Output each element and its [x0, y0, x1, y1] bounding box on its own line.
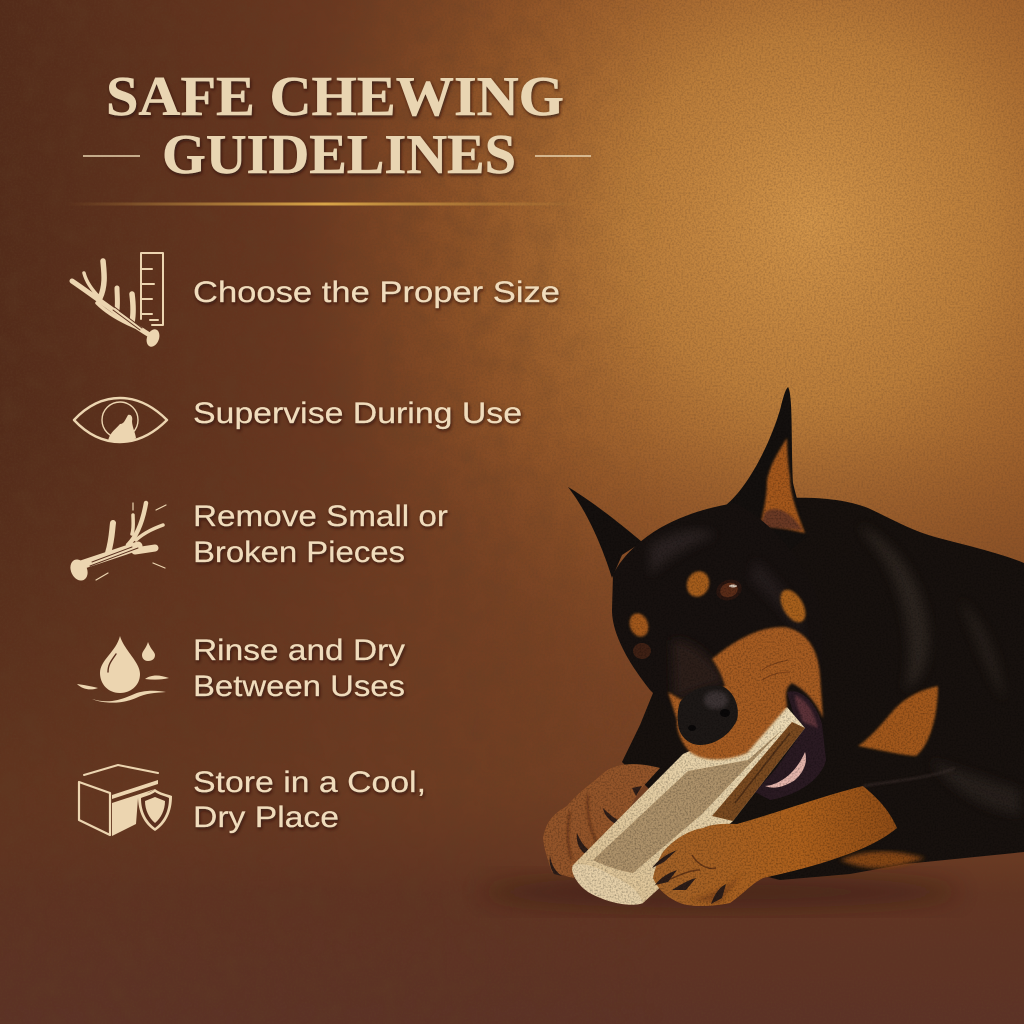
title: SAFE CHEWING: [106, 66, 564, 128]
title: [106, 66, 564, 186]
text: store in a cool dry place: [193, 766, 426, 834]
eyes: [633, 576, 745, 659]
head: [612, 503, 827, 800]
guideline 3: remove small or broken pieces: [67, 500, 448, 583]
text: remove small or broken pieces: Broken Pieces: [193, 536, 405, 569]
text: store in a cool dry place: Store in a Cool,: [193, 766, 426, 799]
text: remove small or broken pieces: Remove Small or: [193, 500, 448, 533]
guideline 1: choose the proper size: [72, 253, 560, 349]
chest tan patch: [858, 686, 938, 756]
dog body: [622, 498, 1024, 880]
text: choose the proper size: Choose the Proper Size: [193, 276, 560, 309]
guideline 2: supervise during use: [74, 397, 522, 442]
gold divider: [65, 202, 585, 206]
right front leg: [652, 768, 955, 906]
text: rinse and dry between uses: Rinse and Dry: [193, 634, 405, 667]
icon: antler with ruler: [72, 253, 163, 349]
muzzle tan and lower lip: [668, 627, 823, 759]
left front paw: [543, 764, 660, 878]
guideline 4: rinse and dry between uses: [77, 634, 405, 703]
floor shadow: [480, 876, 960, 908]
text: rinse and dry between uses: [193, 634, 405, 703]
text: supervise during use: Supervise During Use: [193, 397, 522, 430]
left ear: [568, 487, 642, 578]
snout bridge: [672, 640, 728, 700]
title: GUIDELINES: [162, 124, 516, 186]
icon: water drops and waves: [77, 636, 169, 703]
nose: [678, 686, 738, 745]
text: rinse and dry between uses: Between Uses: [193, 670, 405, 703]
icon: eye with dog: [74, 398, 167, 442]
dog chewing antler: [543, 387, 1024, 906]
right ear: [726, 387, 807, 550]
icon: box with shield: [79, 765, 172, 836]
eyebrow spots: [683, 568, 713, 600]
title side dashes: [83, 155, 591, 157]
mouth and tongue: [755, 691, 826, 800]
text: store in a cool dry place: Dry Place: [193, 801, 339, 834]
guideline 5: store in a cool dry place: [79, 765, 426, 836]
icon: broken antler: [67, 503, 166, 583]
antler chew: [572, 707, 805, 905]
text: remove small or broken pieces: [193, 500, 448, 569]
